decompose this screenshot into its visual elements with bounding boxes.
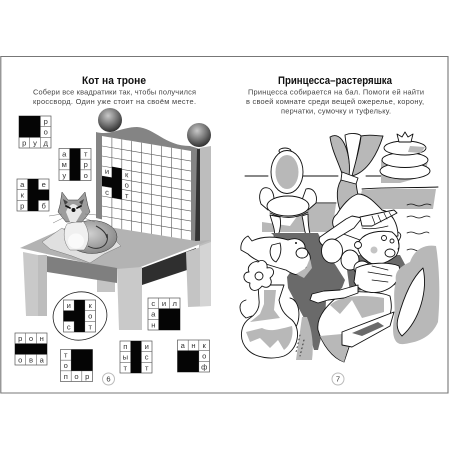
puzzle tile: топор: п (64, 372, 68, 381)
puzzle tile: circled starting piece: и (67, 301, 71, 310)
puzzle tile: сил: а (151, 310, 156, 319)
puzzle tile: топор: о (74, 372, 79, 381)
wave marks (407, 204, 431, 251)
seat aprons (47, 256, 117, 283)
puzzle tile: анк: а (181, 341, 186, 350)
vase with flower (240, 260, 304, 358)
puzzle tile: амутро: т (84, 150, 88, 158)
princess (310, 194, 401, 362)
puzzle tile: рон: н (40, 334, 44, 343)
puzzle tile: руд: р (22, 138, 26, 147)
instructions: left page (33, 88, 196, 106)
puzzle tile: анк: о (202, 352, 206, 361)
dog (241, 236, 312, 278)
puzzle tile: акреб: б (42, 201, 47, 210)
bodice and big sleeve (354, 263, 400, 293)
puzzle tile: амутро (59, 148, 91, 180)
crossword grid on backrest: о (125, 180, 129, 190)
gray strip beside vase (296, 317, 313, 360)
puzzle tile: руд: р (44, 117, 48, 126)
gray floor patch (262, 204, 336, 232)
puzzle tile: сил: с (151, 299, 155, 308)
puzzle tile: топор (60, 350, 92, 382)
crossword grid on backrest: с (105, 188, 109, 197)
ball finial left (98, 108, 122, 132)
puzzle tile: пыт (120, 341, 152, 373)
seat top (20, 222, 211, 270)
instructions: right page: Принцесса собирается на бал. Помоги ей найти (248, 88, 424, 96)
dress (318, 291, 391, 362)
puzzle tile: circled starting piece: с (67, 322, 71, 331)
puzzle tile: руд: у (33, 138, 37, 147)
panel: left page, cat on the throne (15, 75, 211, 385)
puzzle tile: амутро: а (62, 150, 67, 158)
page frame (1, 56, 448, 393)
page number 6: 6 (106, 375, 111, 384)
backrest frame (96, 127, 200, 243)
puzzle tile: амутро: у (62, 171, 66, 180)
sleeves (322, 239, 342, 263)
hair bun (333, 194, 398, 240)
armchair with oval mirror back (260, 148, 316, 236)
crossword grid on backrest (102, 136, 191, 241)
puzzle tile: руд (19, 116, 51, 148)
puzzle tile: circled starting piece (49, 287, 111, 345)
puzzle tile: амутро: р (84, 160, 88, 169)
raised arm and comb (319, 216, 362, 246)
puzzle tile: акреб: а (20, 180, 25, 189)
puzzle tile: пыт: т (145, 363, 149, 372)
puzzle tile: пыт: и (145, 342, 149, 351)
puzzle tile: рон: в (29, 355, 33, 364)
ball finial right (187, 123, 211, 147)
crossword grid on backrest: и (105, 167, 109, 176)
puzzle tile: сил: и (162, 299, 166, 308)
head (358, 231, 399, 264)
puzzle tile: рон: а (40, 355, 45, 364)
title: left page: Кот на троне (82, 75, 146, 87)
illustration: throne chair (20, 108, 211, 330)
instructions: right page: в своей комнате среди вещей ожерелье, корону, (246, 97, 424, 106)
instructions: left page: кроссворд. Один уже стоит на своём месте. (33, 97, 196, 106)
puzzle tile: амутро: о (84, 171, 88, 180)
puzzle tile: акреб: е (42, 180, 46, 189)
puzzle tile: сил: л (172, 299, 177, 308)
puzzle tile: рон (15, 333, 47, 365)
puzzle tile: руд: д (43, 138, 48, 147)
puzzle tile: анк: к (203, 341, 207, 350)
puzzle tile: анк: ф (201, 362, 207, 371)
wall and floor lines (245, 176, 438, 203)
handbag box (342, 312, 394, 347)
cushion (42, 228, 121, 263)
puzzle tile: рон: р (18, 334, 22, 343)
large gray mirror blob (393, 246, 439, 344)
instructions: right page: перчатки, сумочку и туфельку. (281, 106, 391, 116)
puzzle tile: пыт: ы (123, 353, 128, 362)
cat (49, 192, 117, 254)
page number 7 (332, 373, 344, 385)
instructions: right page (246, 88, 424, 116)
crossword grid on backrest: к (125, 170, 129, 180)
page number 6 (102, 373, 114, 385)
puzzle tile: руд: о (44, 128, 48, 137)
puzzle tile: сил (148, 298, 180, 330)
illustration: princess room (240, 132, 439, 362)
puzzle tile: сил: н (151, 320, 155, 329)
pillow stack with crown (380, 132, 430, 183)
puzzle tile: рон: о (18, 355, 22, 364)
puzzle tile: топор: о (64, 361, 68, 370)
puzzle tile: топор: т (64, 350, 68, 360)
puzzle tile: топор: р (85, 372, 89, 381)
puzzle tile: пыт: п (123, 342, 127, 351)
curtain (330, 133, 383, 214)
dark carpet (271, 233, 409, 350)
puzzle tile: акреб: к (21, 191, 25, 200)
gray wall band (358, 189, 436, 209)
puzzle tile: circled starting piece: о (88, 312, 92, 321)
puzzle tile: рон: о (29, 334, 33, 343)
chair legs (23, 252, 47, 316)
puzzle tile: анк (178, 340, 210, 372)
puzzle tile: пыт: т (124, 363, 128, 372)
title: right page: Принцесса–растеряшка (278, 75, 393, 87)
puzzle tile: circled starting piece: к (89, 301, 93, 310)
puzzle tile: акреб (17, 179, 49, 211)
puzzle tile: анк: н (191, 341, 196, 350)
puzzle tile: circled starting piece: т (88, 322, 92, 331)
panel: right page, scatterbrained princess (240, 75, 439, 385)
chair back legs (97, 270, 115, 292)
instructions: left page: Собери все квадратики так, чтобы получился (33, 88, 196, 96)
crossword grid on backrest: т (125, 191, 129, 201)
puzzle tile: пыт: с (145, 353, 149, 362)
puzzle tile: акреб: р (20, 201, 24, 210)
puzzle tile: амутро: м (62, 160, 67, 169)
arm and hand (310, 285, 358, 303)
backrest right post (199, 146, 211, 250)
page number 7: 7 (336, 375, 340, 384)
